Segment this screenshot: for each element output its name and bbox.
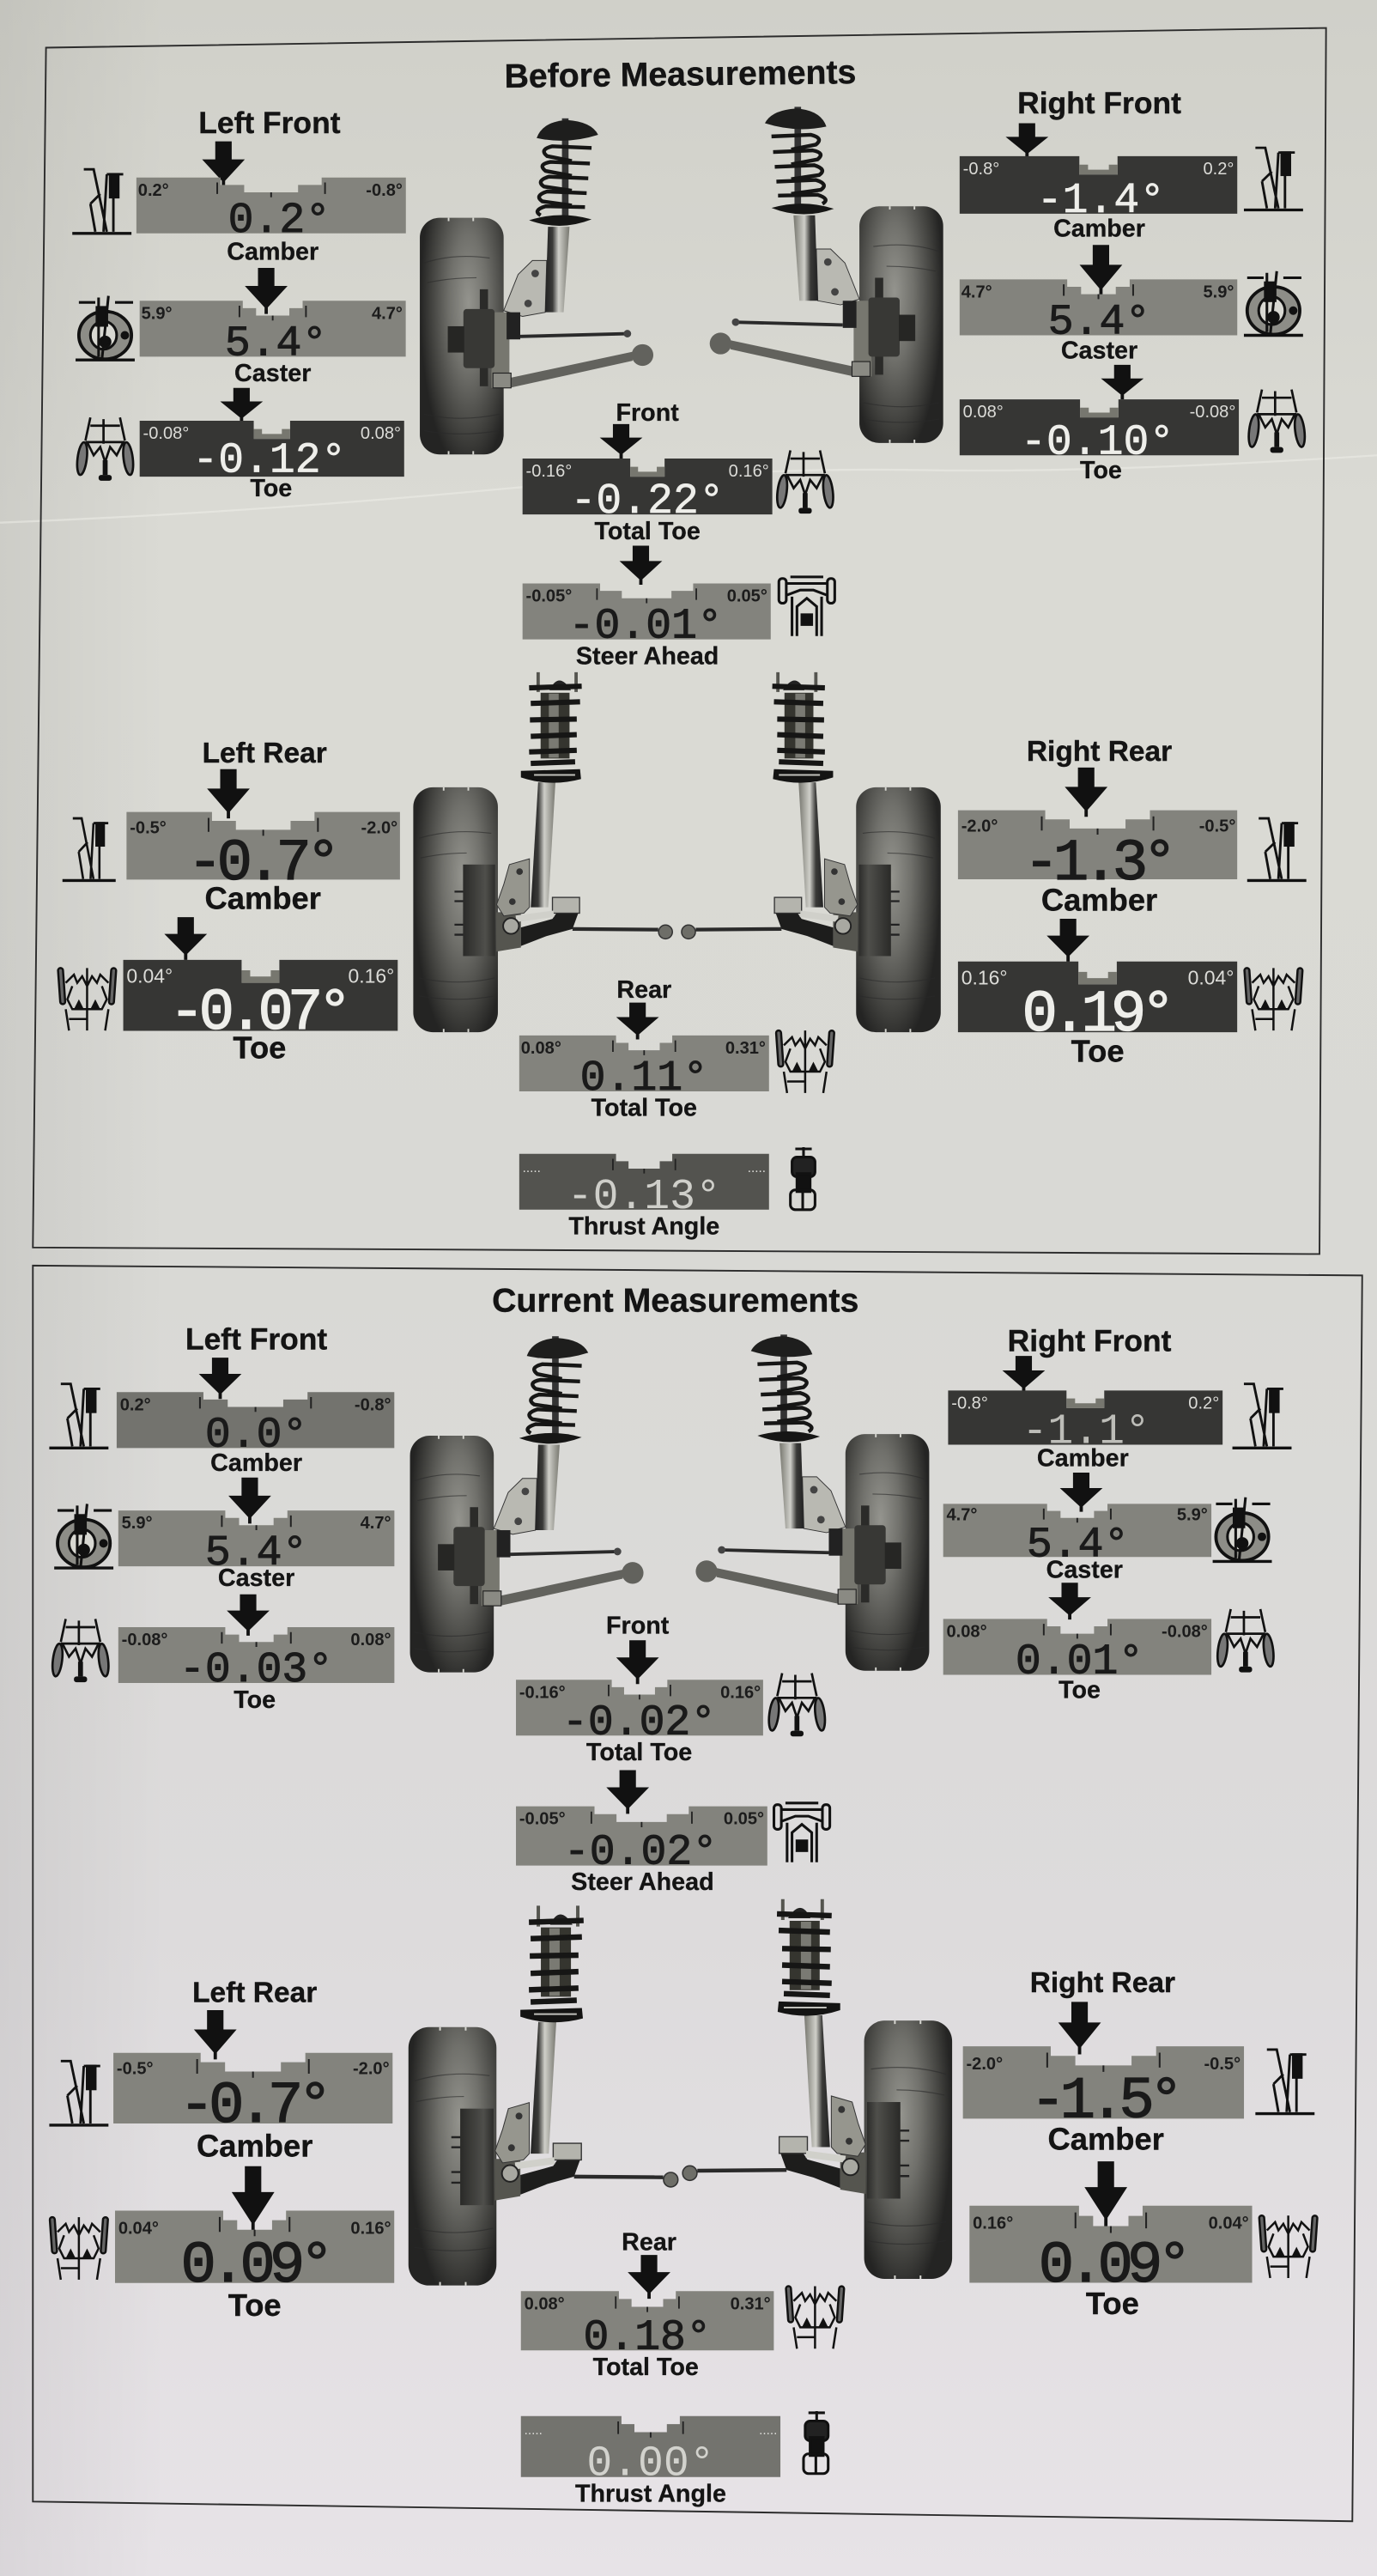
gauge: front total toe: -0.02°: [562, 1698, 716, 1747]
gauge: right rear camber: -1.5°: [1030, 2068, 1178, 2135]
heading: right front: Right Front: [1017, 86, 1181, 120]
icon: rear total toe: [776, 1030, 834, 1093]
heading: left front: Left Front: [185, 1321, 327, 1356]
arrow: rear total toe: [628, 2255, 670, 2299]
gauge: rear total toe: [521, 2291, 773, 2361]
gauge: left front toe: -0.08°: [143, 424, 189, 443]
gauge: thrust angle: .....: [759, 2423, 777, 2438]
gauge: right front caster: 5.4°: [1027, 1522, 1129, 1570]
gauge: steer ahead: [516, 1807, 767, 1877]
gauge: right rear toe: 0.04°: [1188, 967, 1234, 989]
gauge: thrust angle: [519, 1154, 769, 1221]
gauge: right front caster: 5.9°: [1177, 1506, 1208, 1525]
gauge: left rear camber: [126, 812, 400, 897]
arrow: left rear toe: [164, 917, 207, 960]
gauge: right rear toe: [958, 962, 1237, 1048]
heading: left rear: Left Rear: [203, 738, 327, 769]
label: rear: Rear: [616, 976, 671, 1004]
gauge: left front toe: [118, 1627, 394, 1694]
gauge: right front caster: [960, 279, 1237, 347]
rear suspension, right: [682, 672, 941, 1032]
gauge: thrust angle: [521, 2416, 780, 2488]
arrow: steer ahead: [620, 545, 662, 585]
gauge: left front caster: 5.4°: [225, 319, 327, 368]
gauge: right front camber: -0.8°: [963, 160, 999, 179]
label: toe: Toe: [1071, 1034, 1125, 1069]
heading: before measurements: Before Measurements: [504, 53, 857, 95]
label: front: Front: [606, 1613, 670, 1640]
gauge: left rear toe: 0.16°: [350, 2219, 391, 2238]
label: camber: Camber: [1037, 1444, 1129, 1472]
panel: before measurements: [33, 28, 1326, 1254]
gauge: right rear toe: 0.16°: [973, 2215, 1013, 2233]
arrow: right front camber: [1003, 1356, 1045, 1393]
label: camber: Camber: [1047, 2122, 1164, 2157]
gauge: front total toe: 0.16°: [729, 462, 769, 481]
gauge: left rear toe: [124, 960, 397, 1047]
gauge: left front caster: 4.7°: [361, 1514, 391, 1533]
gauge: right front toe: -0.08°: [1162, 1622, 1208, 1641]
heading: right front: Right Front: [1008, 1323, 1172, 1358]
gauge: steer ahead: 0.05°: [727, 587, 767, 606]
gauge: thrust angle: .....: [748, 1161, 766, 1176]
gauge: left front caster: [140, 301, 406, 368]
gauge: right rear camber: -0.5°: [1204, 2055, 1241, 2074]
gauge: right front toe: [943, 1619, 1211, 1686]
label: caster: Caster: [1046, 1557, 1123, 1584]
label: camber: Camber: [205, 881, 321, 916]
arrow: right front caster: [1060, 1473, 1102, 1512]
gauge: right front camber: -1.4°: [1037, 177, 1165, 225]
gauge: right front camber: 0.2°: [1204, 160, 1234, 179]
gauge: left front caster: [118, 1510, 394, 1577]
rear suspension, left: [413, 672, 672, 1032]
gauge: front total toe: -0.16°: [526, 462, 572, 481]
arrow: left front toe: [220, 388, 263, 422]
icon: left rear toe: [58, 968, 116, 1030]
gauge: right rear camber: [958, 811, 1237, 897]
gauge: right rear toe: 0.16°: [961, 967, 1008, 989]
heading: current measurements: Current Measurements: [492, 1281, 858, 1319]
gauge: rear total toe: 0.18°: [584, 2313, 712, 2361]
label: caster: Caster: [1061, 337, 1137, 364]
gauge: left rear toe: 0.16°: [349, 965, 394, 987]
gauge: left front camber: 0.2°: [228, 197, 331, 245]
icon: left front caster: [76, 296, 135, 360]
gauge: right rear toe: 0.09°: [1039, 2233, 1186, 2300]
gauge: right rear toe: [969, 2206, 1253, 2300]
icon: left front caster: [54, 1504, 113, 1568]
gauge: left rear camber: -2.0°: [361, 818, 397, 837]
gauge: front total toe: -0.22°: [571, 477, 725, 526]
rear suspension, left: [409, 1905, 678, 2286]
heading: right rear: Right Rear: [1027, 736, 1172, 768]
label: total toe: Total Toe: [586, 1739, 692, 1766]
icon: left rear toe: [50, 2217, 108, 2280]
icon: right front toe: [1216, 1609, 1275, 1673]
label: toe: Toe: [1080, 457, 1122, 484]
gauge: left front caster: 5.9°: [142, 304, 173, 323]
gauge: left rear camber: -0.5°: [130, 818, 167, 837]
icon: left front camber: [72, 169, 131, 234]
label: camber: Camber: [210, 1449, 302, 1477]
icon: right front caster: [1244, 271, 1303, 335]
gauge: right front toe: [960, 399, 1239, 466]
label: toe: Toe: [228, 2287, 282, 2323]
panel: current measurements: [33, 1266, 1362, 2521]
rear suspension, right: [682, 1899, 952, 2279]
gauge: right front caster: 4.7°: [947, 1506, 977, 1525]
gauge: thrust angle: -0.13°: [567, 1173, 721, 1221]
arrow: steer ahead: [606, 1771, 649, 1814]
gauge: right front camber: 0.2°: [1188, 1394, 1219, 1413]
arrow: left front toe: [227, 1595, 270, 1636]
gauge: right front camber: -0.8°: [951, 1394, 988, 1413]
label: front: Front: [616, 399, 679, 427]
gauge: left rear camber: -0.7°: [187, 830, 335, 897]
gauge: left front camber: -0.8°: [355, 1395, 391, 1414]
arrow: left rear toe: [232, 2166, 275, 2232]
arrow: right rear toe: [1084, 2161, 1127, 2227]
gauge: right rear camber: -2.0°: [966, 2055, 1003, 2074]
icon: right rear camber: [1247, 818, 1307, 880]
gauge: right front camber: [948, 1390, 1222, 1456]
gauge: front total toe: -0.16°: [519, 1683, 566, 1702]
gauge: right front toe: -0.10°: [1021, 418, 1174, 466]
icon: front total toe: [767, 1674, 827, 1736]
gauge: thrust angle: .....: [525, 2423, 543, 2438]
gauge: right rear camber: -2.0°: [961, 817, 998, 836]
icon: steer ahead: [779, 577, 834, 636]
arrow: right front toe: [1101, 365, 1143, 399]
arrow: left rear camber: [194, 2010, 237, 2059]
gauge: left front caster: 5.4°: [205, 1529, 307, 1577]
arrow: left front camber: [199, 1358, 241, 1399]
gauge: left front caster: 5.9°: [122, 1514, 153, 1533]
gauge: left front toe: 0.08°: [350, 1631, 391, 1649]
icon: right front camber: [1244, 148, 1303, 210]
gauge: left rear toe: [115, 2210, 394, 2300]
gauge: steer ahead: 0.05°: [724, 1810, 764, 1829]
icon: steer ahead: [774, 1803, 830, 1862]
gauge: left rear camber: [113, 2053, 392, 2140]
arrow: right rear camber: [1059, 2002, 1101, 2054]
label: rear: Rear: [622, 2228, 676, 2256]
gauge: rear total toe: 0.08°: [525, 2294, 565, 2313]
heading: left front: Left Front: [198, 106, 341, 140]
gauge: steer ahead: -0.05°: [526, 587, 572, 606]
arrow: left rear camber: [207, 769, 250, 818]
gauge: front total toe: [523, 459, 773, 526]
arrow: front total toe: [600, 424, 642, 459]
gauge: right front toe: 0.08°: [947, 1622, 987, 1641]
gauge: left rear camber: -0.5°: [117, 2060, 154, 2079]
gauge: left rear toe: 0.04°: [118, 2219, 159, 2238]
arrow: right front caster: [1080, 245, 1122, 295]
label: toe: Toe: [234, 1686, 276, 1714]
gauge: right rear camber: [963, 2046, 1244, 2135]
label: toe: Toe: [1086, 2286, 1139, 2321]
gauge: thrust angle: 0.00°: [586, 2440, 715, 2488]
gauge: right front toe: 0.01°: [1016, 1638, 1143, 1686]
gauge: steer ahead: -0.05°: [519, 1810, 566, 1829]
gauge: left front camber: [117, 1392, 394, 1459]
label: steer ahead: Steer Ahead: [571, 1868, 714, 1896]
icon: right front caster: [1213, 1498, 1271, 1561]
icon: left front toe: [76, 417, 135, 481]
icon: right rear camber: [1255, 2050, 1314, 2114]
arrow: left front camber: [202, 142, 245, 187]
gauge: left front caster: 4.7°: [372, 304, 403, 323]
gauge: left front camber: 0.2°: [120, 1395, 151, 1414]
gauge: thrust angle: .....: [523, 1161, 541, 1176]
label: toe: Toe: [250, 475, 292, 502]
gauge: left front camber: 0.0°: [205, 1411, 307, 1459]
gauge: rear total toe: 0.08°: [521, 1039, 561, 1058]
gauge: right front caster: 5.4°: [1048, 299, 1150, 347]
arrow: right front camber: [1005, 124, 1048, 158]
label: thrust angle: Thrust Angle: [575, 2480, 726, 2507]
gauge: left front toe: -0.08°: [122, 1631, 167, 1649]
gauge: right front toe: 0.08°: [963, 403, 1004, 422]
icon: right rear toe: [1259, 2215, 1318, 2278]
gauge: right rear toe: 0.04°: [1209, 2215, 1249, 2233]
gauge: left rear toe: 0.09°: [181, 2233, 329, 2300]
gauge: right front camber: -1.1°: [1022, 1408, 1150, 1456]
gauge: left rear toe: 0.04°: [126, 965, 173, 987]
gauge: left front camber: -0.8°: [366, 181, 403, 200]
gauge: front total toe: 0.16°: [720, 1683, 761, 1702]
label: thrust angle: Thrust Angle: [568, 1213, 719, 1241]
gauge: steer ahead: [523, 584, 771, 651]
gauge: left front toe: -0.03°: [179, 1646, 333, 1694]
gauge: rear total toe: 0.31°: [725, 1039, 766, 1058]
gauge: right front camber: [960, 156, 1237, 225]
label: toe: Toe: [1059, 1676, 1101, 1704]
gauge: right front caster: 4.7°: [961, 283, 992, 301]
icon: right front camber: [1233, 1384, 1291, 1448]
arrow: right rear toe: [1046, 919, 1089, 962]
gauge: right rear toe: 0.19°: [1022, 981, 1170, 1048]
gauge: left front toe: [140, 421, 404, 484]
gauge: front total toe: [516, 1680, 763, 1747]
heading: left rear: Left Rear: [192, 1977, 317, 2008]
arrow: left front caster: [245, 268, 288, 314]
gauge: left front camber: [136, 178, 406, 245]
icon: left front camber: [49, 1384, 108, 1448]
label: total toe: Total Toe: [593, 2354, 699, 2381]
icon: rear total toe: [786, 2286, 844, 2348]
gauge: right front toe: -0.08°: [1190, 403, 1235, 422]
label: camber: Camber: [1041, 882, 1157, 917]
label: steer ahead: Steer Ahead: [576, 642, 719, 670]
arrow: rear total toe: [616, 1003, 659, 1039]
gauge: right rear camber: -1.3°: [1023, 830, 1172, 897]
label: camber: Camber: [227, 238, 318, 265]
gauge: right front caster: 5.9°: [1204, 283, 1234, 301]
arrow: right front toe: [1048, 1583, 1091, 1619]
label: caster: Caster: [234, 360, 311, 387]
gauge: left front toe: -0.12°: [192, 436, 346, 484]
gauge: rear total toe: 0.31°: [731, 2294, 771, 2313]
label: total toe: Total Toe: [591, 1095, 697, 1122]
arrow: right rear camber: [1065, 768, 1107, 817]
front suspension, left: [420, 118, 653, 454]
icon: right front toe: [1247, 390, 1307, 453]
icon: left front toe: [51, 1619, 110, 1682]
gauge: left rear toe: -0.07°: [169, 980, 347, 1047]
label: camber: Camber: [197, 2128, 312, 2163]
gauge: left rear camber: -0.7°: [179, 2073, 327, 2140]
icon: left rear camber: [49, 2061, 108, 2125]
icon: left rear camber: [63, 818, 116, 880]
label: caster: Caster: [218, 1564, 294, 1592]
icon: thrust angle: [804, 2411, 828, 2474]
gauge: left front camber: 0.2°: [138, 181, 169, 200]
label: total toe: Total Toe: [594, 518, 701, 545]
icon: front total toe: [775, 450, 834, 513]
front suspension, left: [410, 1336, 644, 1673]
gauge: left front toe: 0.08°: [361, 424, 401, 443]
front suspension, right: [710, 106, 943, 443]
gauge: rear total toe: 0.11°: [580, 1054, 708, 1103]
gauge: left rear camber: -2.0°: [353, 2060, 390, 2079]
arrow: front total toe: [616, 1640, 659, 1684]
label: toe: Toe: [233, 1030, 286, 1066]
gauge: steer ahead: -0.02°: [564, 1829, 718, 1877]
gauge: right rear camber: -0.5°: [1199, 817, 1235, 836]
gauge: rear total toe: [519, 1036, 769, 1103]
label: camber: Camber: [1053, 216, 1145, 243]
gauge: steer ahead: -0.01°: [569, 603, 723, 651]
gauge: right front caster: [943, 1504, 1211, 1570]
icon: right rear toe: [1244, 968, 1302, 1030]
heading: right rear: Right Rear: [1030, 1967, 1175, 1999]
front suspension, right: [695, 1334, 929, 1671]
arrow: left front caster: [228, 1478, 271, 1523]
icon: thrust angle: [791, 1147, 815, 1210]
